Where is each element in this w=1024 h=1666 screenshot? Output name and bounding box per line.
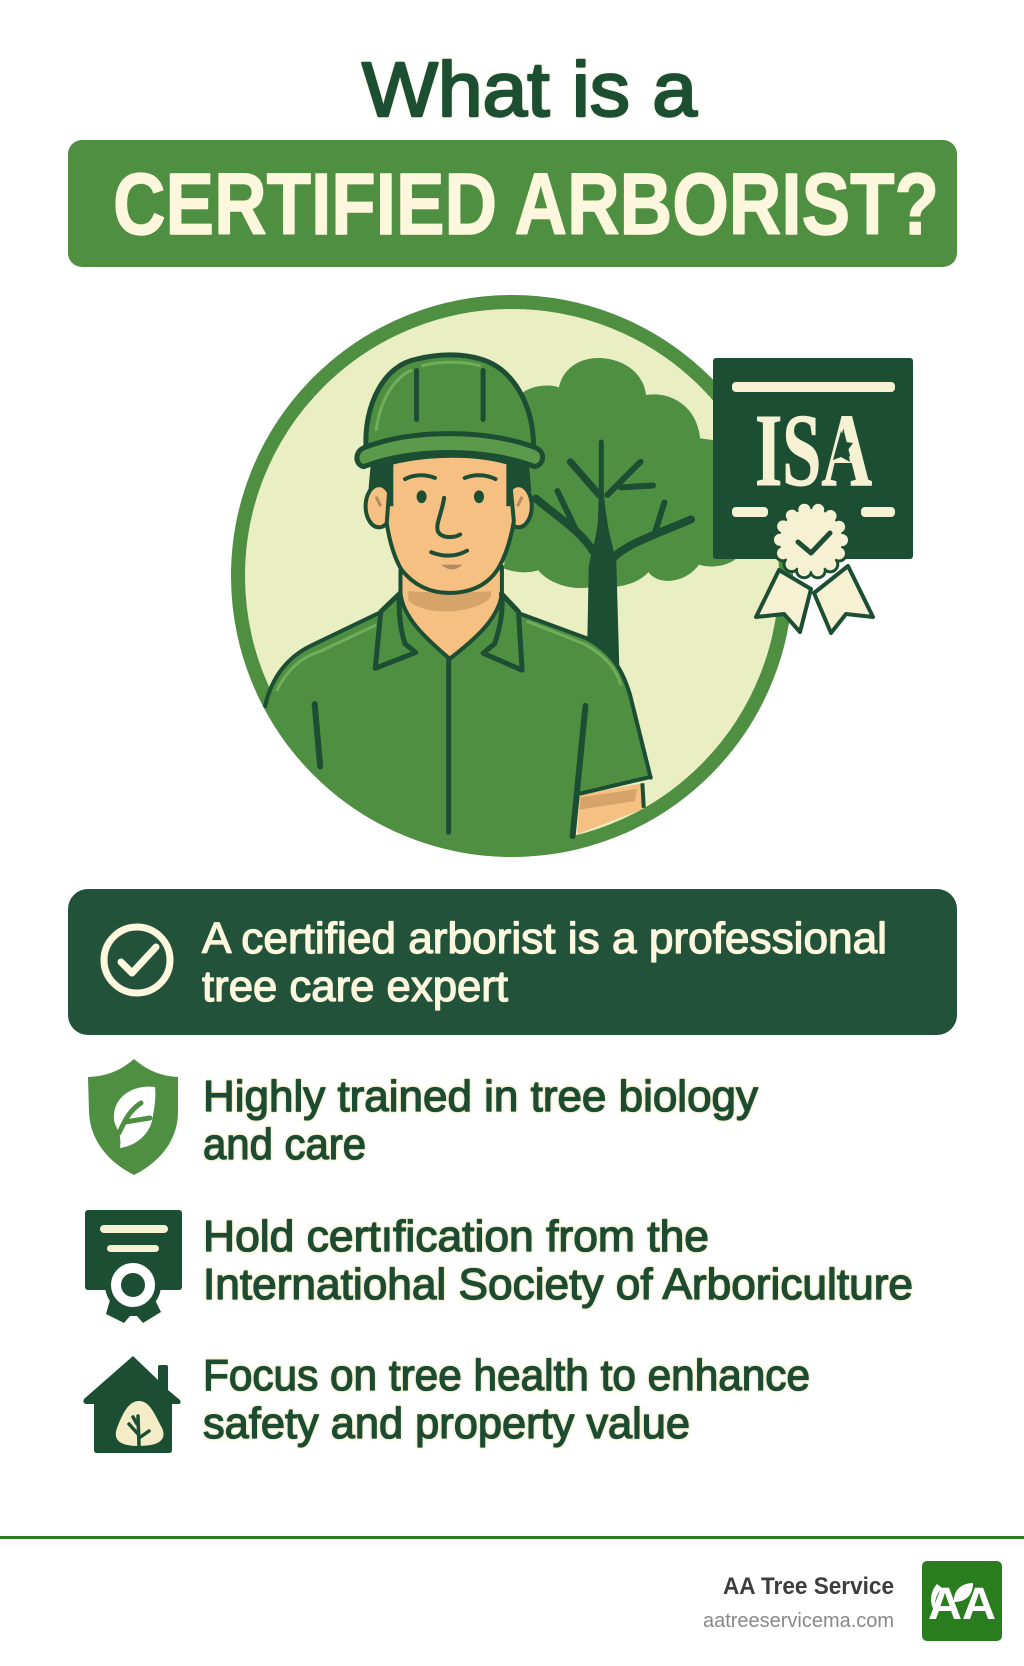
ISA text: ISA [755, 393, 872, 508]
face [387, 456, 514, 593]
footer brand name: AA Tree Service [723, 1573, 894, 1600]
ISA certificate [713, 358, 913, 633]
text: safety and property value [203, 1399, 690, 1448]
icon: house with tree [83, 1356, 181, 1453]
circle background [238, 302, 786, 850]
text [203, 1212, 913, 1309]
arborist and tree [265, 355, 738, 868]
facial features [405, 475, 495, 556]
logo [922, 1561, 1002, 1641]
text: Highly trained in tree biology [203, 1072, 758, 1121]
item: tree health [83, 1351, 810, 1453]
item: ISA certification [85, 1210, 913, 1323]
shirt details [315, 659, 651, 836]
hat brim [357, 434, 543, 467]
title: What is a: What is a [362, 47, 697, 133]
ears and hair [368, 461, 390, 490]
tree trunk and branches [536, 439, 691, 672]
arm [577, 783, 644, 834]
tree canopy [504, 358, 738, 588]
logo: AA [928, 1578, 996, 1629]
text [203, 1072, 758, 1169]
ribbons [756, 570, 811, 632]
text: and care [203, 1120, 366, 1169]
hard hat [366, 355, 534, 448]
seal [780, 509, 842, 571]
definition text [202, 914, 887, 1011]
shoulder highlights [277, 621, 621, 691]
text [203, 1351, 810, 1448]
collar [375, 594, 416, 668]
definition text: tree care expert [202, 962, 508, 1011]
panel: definition [68, 889, 957, 1035]
icon: check circle [104, 927, 170, 993]
icon: certificate [85, 1210, 182, 1323]
banner: Certified Arborist [68, 140, 957, 267]
certificate lines [732, 382, 895, 517]
text: Focus on tree health to enhance [203, 1351, 810, 1400]
shirt [272, 606, 648, 857]
text: Internatiohal Society of Arboriculture [203, 1260, 913, 1309]
footer website: aatreeservicema.com [703, 1610, 894, 1632]
icon: shield with leaf [88, 1059, 178, 1175]
item: tree biology [88, 1059, 758, 1175]
illustration: arborist in circle with tree [238, 302, 786, 868]
text: Hold certıfication from the [203, 1212, 709, 1261]
definition text: A certified arborist is a professional [202, 914, 887, 963]
neck [400, 567, 502, 659]
